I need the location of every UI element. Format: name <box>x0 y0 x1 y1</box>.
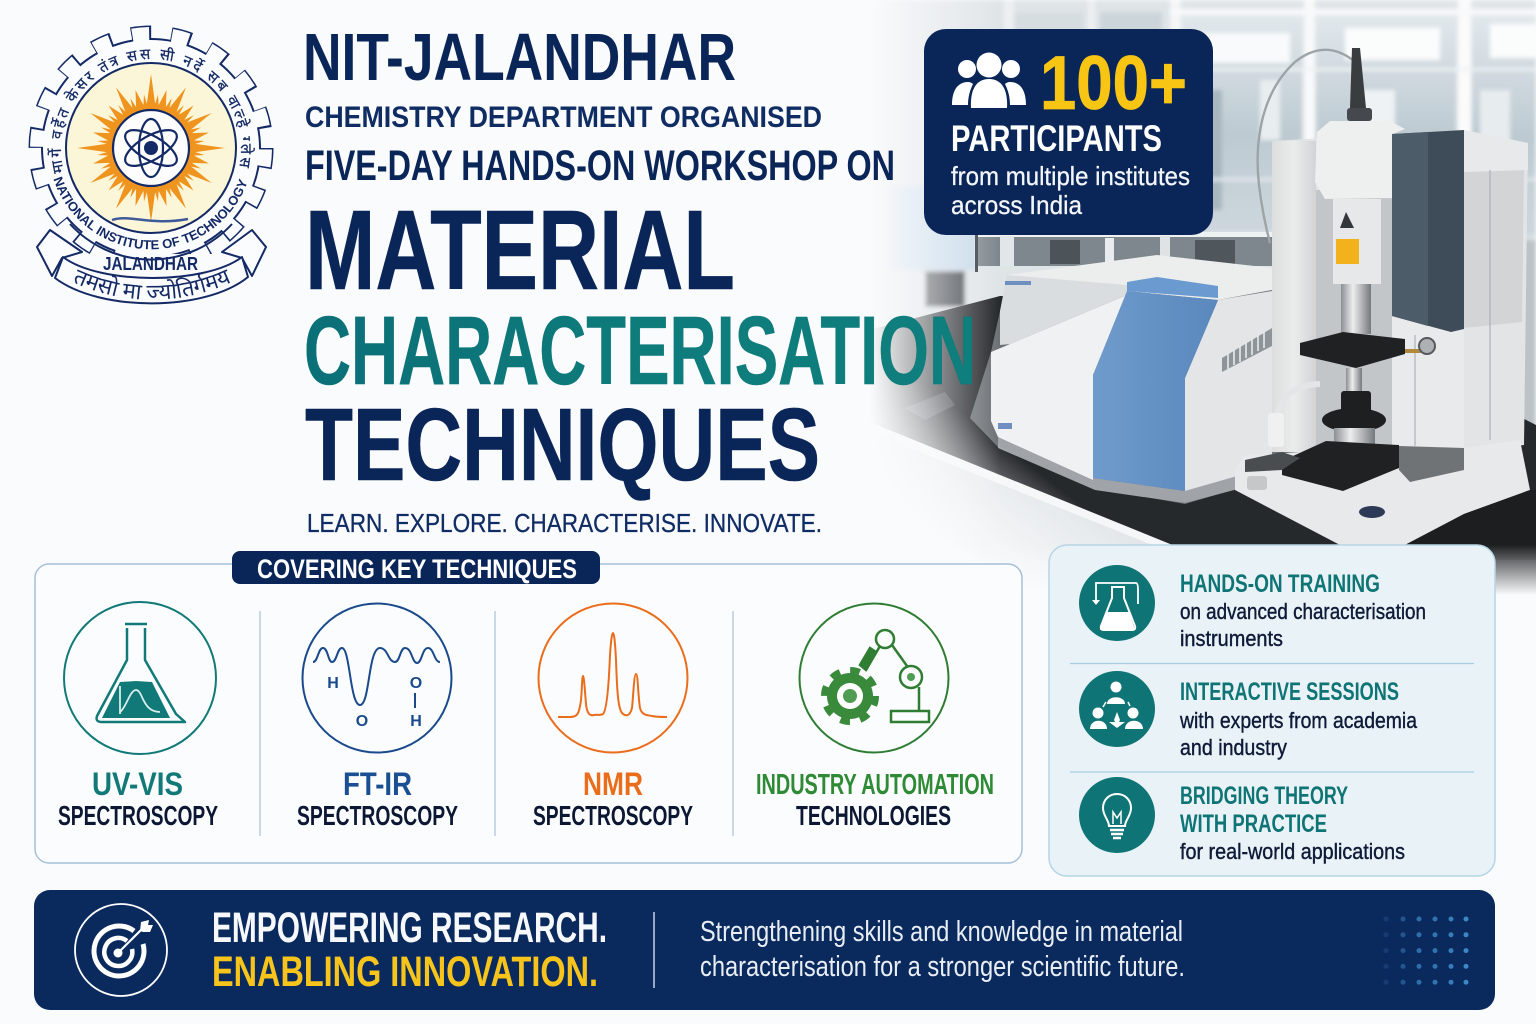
description: from multiple institutes <box>951 161 1190 191</box>
icon: target <box>75 904 167 996</box>
heading: NIT-Jalandhar: NIT-JALANDHAR <box>303 20 736 95</box>
label: INDUSTRY AUTOMATION <box>756 769 994 801</box>
technique: industry automation <box>756 604 994 831</box>
icon: IR spectrum: H <box>327 675 339 692</box>
banner description: Strengthening skills and knowledge in material <box>700 916 1183 948</box>
highlight: bridging theory: for real-world applications <box>1180 839 1405 864</box>
highlight: hands-on training: instruments <box>1180 626 1283 651</box>
highlight: hands-on training <box>1079 565 1426 651</box>
highlight: interactive sessions <box>1079 671 1418 760</box>
label: NMR <box>583 766 643 802</box>
spectrometer <box>970 255 1300 504</box>
technique: FT-IR: SPECTROSCOPY <box>297 800 458 831</box>
emblem lower mask <box>45 254 257 284</box>
subheading: workshop: FIVE-DAY HANDS-ON WORKSHOP ON <box>305 142 895 190</box>
description <box>951 161 1190 220</box>
description: across India <box>951 190 1082 220</box>
main title: techniques: TECHNIQUES <box>305 387 820 502</box>
title block <box>303 20 976 538</box>
river line <box>112 218 188 221</box>
panel: workshop highlights <box>1049 545 1495 876</box>
icon: light bulb <box>1079 777 1155 853</box>
atom symbol <box>113 110 189 186</box>
icon: flask <box>1079 565 1155 641</box>
label: participants: PARTICIPANTS <box>951 118 1162 159</box>
icon: group <box>1079 671 1155 747</box>
photo: laboratory instruments <box>850 0 1536 600</box>
panel: covering key techniques <box>35 551 1022 863</box>
icon: IR spectrum: H <box>410 713 422 730</box>
icon: IR spectrum <box>302 604 452 752</box>
banner: empowering research: characterisation for a stronger scientific future. <box>700 951 1185 983</box>
gear lower edge <box>70 224 232 260</box>
technique: NMR: SPECTROSCOPY <box>533 800 693 831</box>
highlight: bridging theory: BRIDGING THEORY <box>1180 782 1348 810</box>
technique: UV-Vis <box>58 602 218 831</box>
heading: EMPOWERING RESEARCH. <box>212 904 607 952</box>
technique: industry automation: TECHNOLOGIES <box>796 800 951 831</box>
stat: 100+: 100+ <box>1040 41 1187 126</box>
highlight: hands-on training: HANDS-ON TRAINING <box>1180 570 1380 598</box>
background clutter <box>975 232 1272 272</box>
icon: NMR spectrum <box>538 604 688 752</box>
icon: IR spectrum: O <box>410 675 422 692</box>
icon: people <box>952 52 1026 108</box>
highlight: interactive sessions: and industry <box>1180 735 1287 760</box>
heading pill: COVERING KEY TECHNIQUES <box>257 554 577 584</box>
main title: characterisation: CHARACTERISATION <box>304 296 976 405</box>
main title: material: MATERIAL <box>305 187 735 313</box>
highlight: interactive sessions: INTERACTIVE SESSIONS <box>1180 678 1399 706</box>
label: FT-IR <box>343 766 412 802</box>
gear outline <box>36 33 266 263</box>
technique: FT-IR <box>297 604 458 831</box>
banner: empowering research: ENABLING INNOVATION. <box>212 948 598 996</box>
technique: NMR <box>533 604 693 831</box>
lab window background <box>892 0 1536 425</box>
icon: IR spectrum: O <box>356 713 368 730</box>
banner: empowering research <box>34 890 1495 1010</box>
bench <box>850 296 1536 600</box>
technique: UV-Vis: SPECTROSCOPY <box>58 800 218 831</box>
emblem inner circle <box>66 63 236 233</box>
bench cabinet <box>908 448 1151 544</box>
highlight: hands-on training: on advanced characterisation <box>1180 599 1426 624</box>
subheading: CHEMISTRY DEPARTMENT ORGANISED <box>305 101 822 134</box>
label: UV-VIS <box>92 766 183 802</box>
sun rays <box>77 74 225 222</box>
icon: flask <box>64 602 216 754</box>
highlight: bridging theory: WITH PRACTICE <box>1180 810 1327 838</box>
logo: NIT Jalandhar emblem <box>28 26 274 304</box>
highlight: bridging theory <box>1079 777 1405 864</box>
indentation tester <box>1235 48 1536 560</box>
motto: तमसो मा ज्योतिर्गमय <box>74 269 230 300</box>
icon: gear and robot arm <box>800 604 948 752</box>
highlight: interactive sessions: with experts from academia <box>1179 708 1418 733</box>
institute name arc: NATIONAL INSTITUTE OF TECHNOLOGY <box>54 176 246 250</box>
ribbon <box>37 230 266 303</box>
tagline: LEARN. EXPLORE. CHARACTERISE. INNOVATE. <box>307 508 822 538</box>
JALANDHAR: JALANDHAR <box>103 254 198 274</box>
panel: participants badge <box>924 29 1213 235</box>
